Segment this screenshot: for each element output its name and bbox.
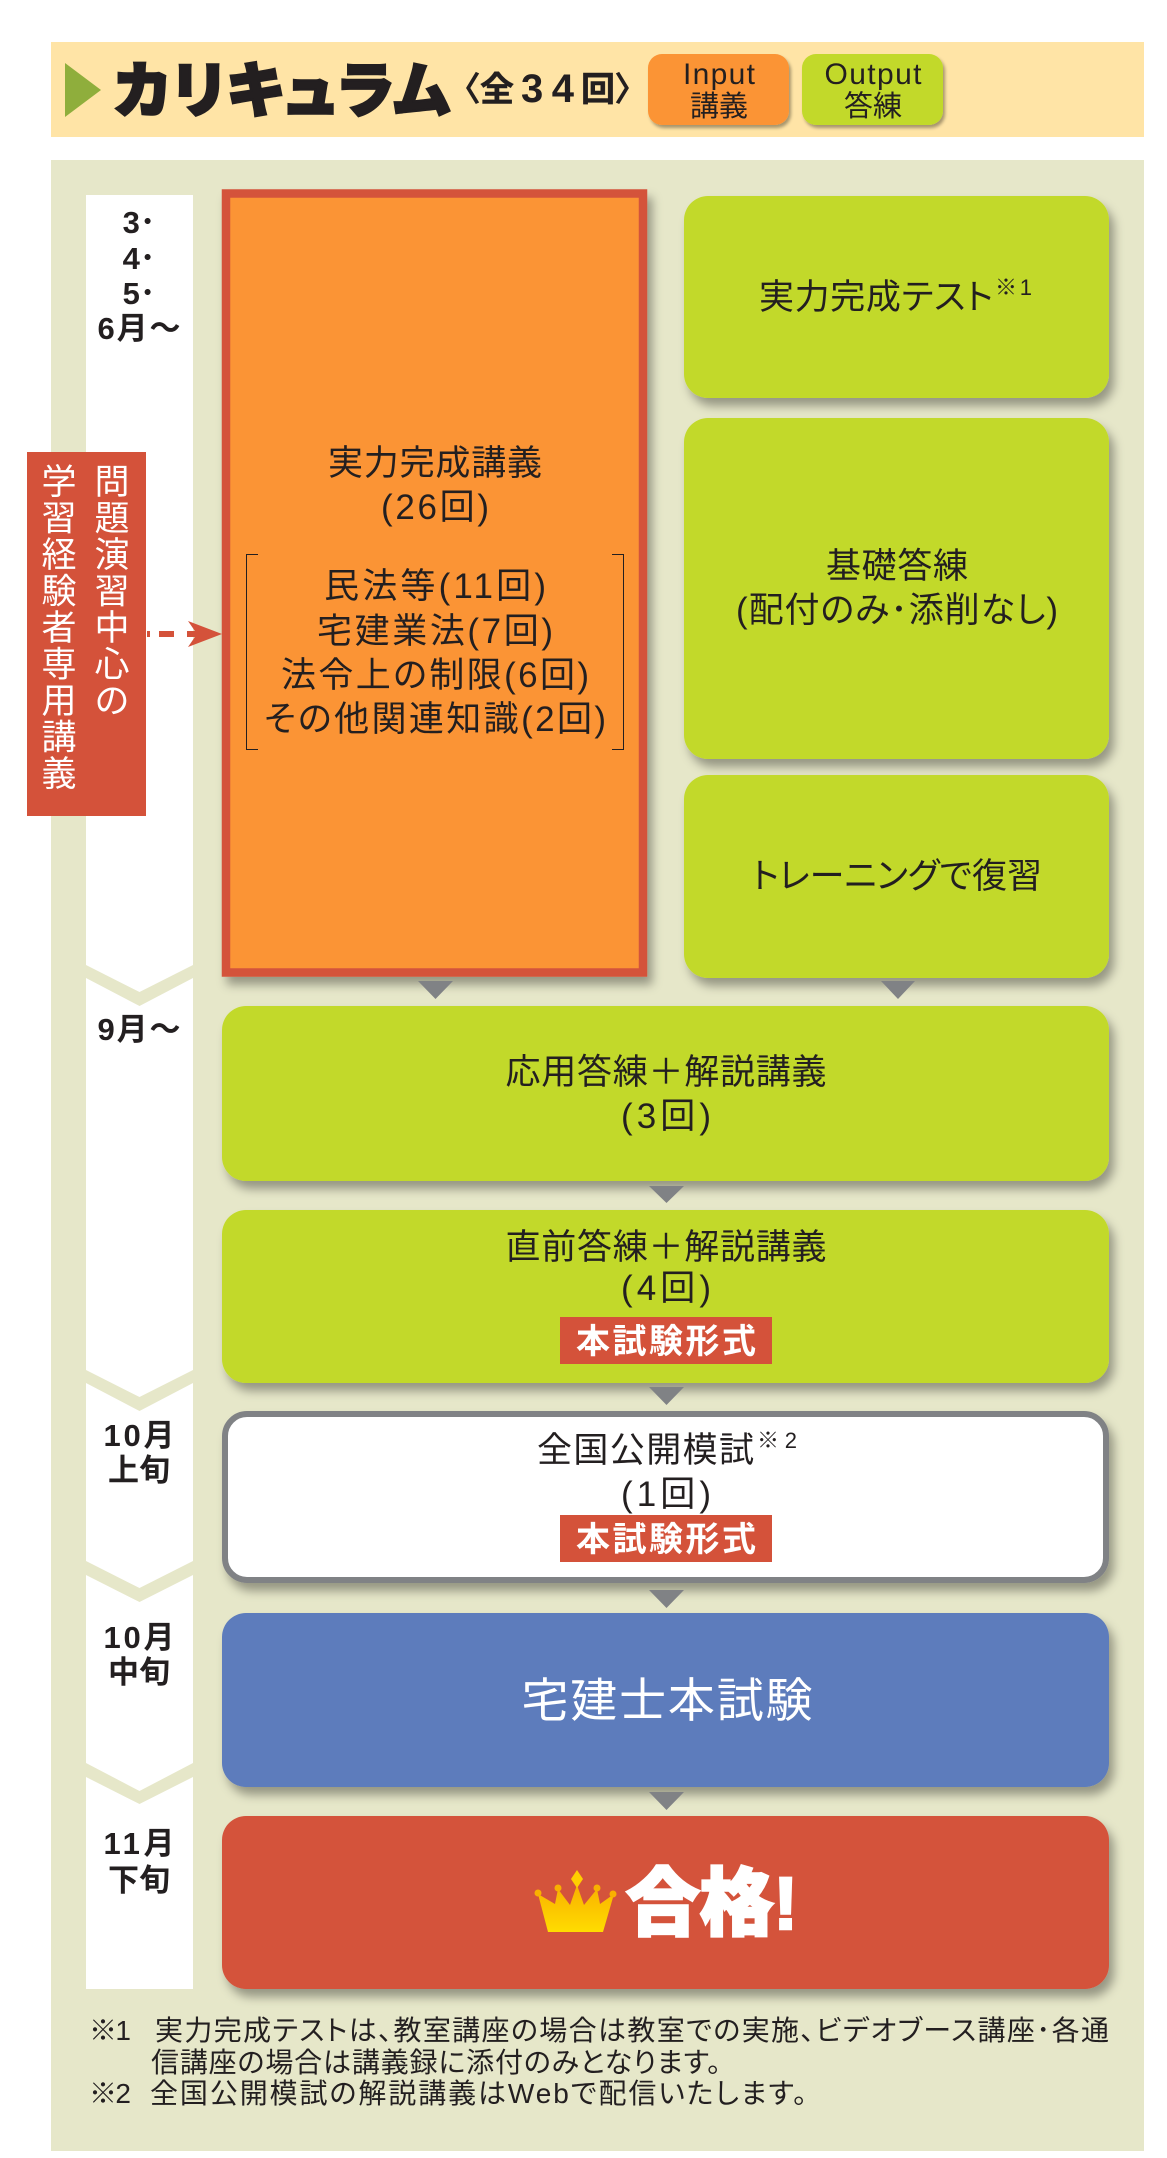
legend: input lecture: Input bbox=[683, 58, 756, 91]
session count: 34 bbox=[521, 67, 575, 111]
footnotes: 全国公開模試の解説講義はWebで配信いたします。 bbox=[150, 2078, 807, 2109]
pass text: 合格! bbox=[626, 1862, 798, 1945]
panel: final exercise: 直前答練＋解説講義 bbox=[506, 1228, 826, 1267]
exam format tag bbox=[560, 1515, 772, 1562]
exam format tag: 本試験形式 bbox=[576, 1323, 756, 1361]
arrow: dashed to lecture bbox=[147, 621, 222, 647]
bracket bbox=[246, 554, 624, 750]
icon: crown bbox=[534, 1870, 616, 1932]
footnotes: ※1 bbox=[89, 2015, 131, 2046]
month labels bbox=[98, 205, 180, 1898]
panel: basic exercise bbox=[684, 418, 1109, 759]
month labels: 中旬 bbox=[108, 1655, 170, 1690]
tag: practice-focused lecture for experienced learners: 問題演習中心の bbox=[94, 463, 130, 721]
footnotes: 実力完成テストは、教室講座の場合は教室での実施、ビデオブース講座･各通 bbox=[155, 2015, 1109, 2046]
lecture breakdown: 法令上の制限(6回) bbox=[281, 656, 589, 695]
exam format tag bbox=[560, 1317, 772, 1364]
exam format tag: 本試験形式 bbox=[576, 1521, 756, 1559]
panel: applied exercise: 応用答練＋解説講義 bbox=[506, 1053, 826, 1092]
icon: header triangle bbox=[65, 63, 101, 117]
footnotes: 信講座の場合は講義録に添付のみとなります。 bbox=[151, 2047, 721, 2078]
panel: training: トレーニングで復習 bbox=[752, 857, 1042, 896]
panel: real exam: 宅建士本試験 bbox=[522, 1674, 812, 1727]
panel: applied exercise bbox=[222, 1006, 1109, 1181]
month labels: 4･ bbox=[123, 241, 155, 276]
panel: applied exercise: (3回) bbox=[621, 1097, 711, 1136]
panel: final exercise: (4回) bbox=[621, 1269, 711, 1308]
panel: mock exam: 全国公開模試 bbox=[537, 1431, 754, 1470]
panel: basic exercise: (配付のみ･添削なし) bbox=[736, 591, 1058, 630]
legend: output exercise: 答練 bbox=[844, 90, 902, 123]
title: カリキュラム bbox=[114, 58, 450, 125]
panel: lecture orange box bbox=[226, 194, 643, 972]
month labels: 10月 bbox=[104, 1620, 174, 1655]
month labels: 10月 bbox=[104, 1418, 174, 1453]
session count bbox=[447, 67, 648, 111]
legend: output exercise bbox=[802, 54, 943, 125]
footnotes bbox=[89, 2015, 1109, 2109]
session count: 〉 bbox=[614, 71, 648, 109]
month labels: 5･ bbox=[123, 276, 155, 311]
lecture heading: 実力完成講義 bbox=[328, 444, 542, 483]
panel: practice test: ※1 bbox=[995, 275, 1032, 300]
month labels: 11月 bbox=[104, 1826, 174, 1861]
legend: input lecture bbox=[648, 54, 789, 125]
panel: mock exam bbox=[225, 1414, 1106, 1580]
panel: basic exercise: 基礎答練 bbox=[826, 547, 968, 586]
lecture breakdown: その他関連知識(2回) bbox=[264, 700, 606, 739]
footnotes: ※2 bbox=[89, 2078, 131, 2109]
tag: practice-focused lecture for experienced learners bbox=[27, 452, 146, 816]
tag: practice-focused lecture for experienced learners: 学習経験者専用講義 bbox=[41, 463, 77, 794]
lecture count: (26回) bbox=[381, 488, 489, 527]
session count: 回 bbox=[581, 71, 615, 109]
panel: pass bbox=[222, 1816, 1109, 1989]
panel: mock exam: (1回) bbox=[621, 1475, 711, 1514]
panel: final exercise bbox=[222, 1210, 1109, 1383]
timeline strip bbox=[86, 195, 193, 1989]
panel: practice test bbox=[684, 196, 1109, 398]
legend: input lecture: 講義 bbox=[690, 90, 748, 123]
session count: 〈 bbox=[447, 71, 481, 109]
arrows between stages bbox=[418, 981, 915, 1810]
panel: training bbox=[684, 775, 1109, 978]
panel: practice test: 実力完成テスト bbox=[759, 278, 993, 317]
lecture breakdown: 民法等(11回) bbox=[324, 567, 546, 606]
panel: mock exam: ※2 bbox=[757, 1428, 797, 1453]
lecture breakdown bbox=[264, 567, 606, 739]
header band bbox=[51, 42, 1144, 137]
month labels: 6月～ bbox=[98, 311, 180, 346]
month labels: 上旬 bbox=[108, 1453, 170, 1488]
legend: output exercise: Output bbox=[824, 58, 922, 91]
lecture breakdown: 宅建業法(7回) bbox=[317, 612, 553, 651]
month labels: 下旬 bbox=[108, 1863, 170, 1898]
month labels: 9月～ bbox=[98, 1012, 180, 1047]
panel: real exam bbox=[222, 1613, 1109, 1787]
month labels: 3･ bbox=[123, 205, 155, 240]
session count: 全 bbox=[480, 71, 514, 109]
